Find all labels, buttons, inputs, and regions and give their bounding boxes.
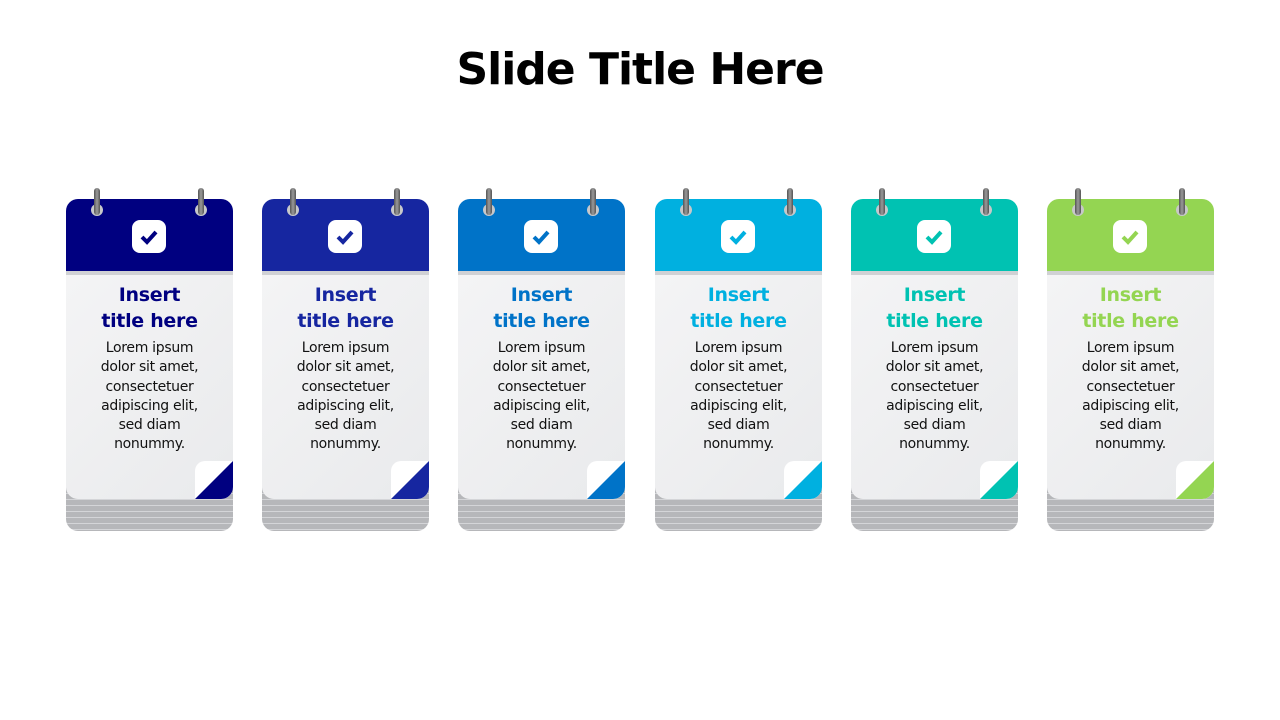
card 2: adipiscing elit, [297,398,394,414]
card 3: Insert [511,284,572,306]
card 1: sed diam [119,417,180,433]
card 6: Lorem ipsum [1087,340,1174,356]
card 6: dolor sit amet, [1082,359,1179,375]
card 1 [66,188,233,531]
card 3: Lorem ipsum [498,340,585,356]
card 1: nonummy. [114,436,185,452]
card 2 [262,188,429,531]
card 4: adipiscing elit, [690,398,787,414]
card 5: adipiscing elit, [886,398,983,414]
card 6: nonummy. [1095,436,1166,452]
card 1: title here [101,310,198,332]
card 4 [655,188,822,531]
card 5: consectetuer [890,379,978,395]
card 6 [1047,188,1214,531]
card 4: Lorem ipsum [695,340,782,356]
card 3: dolor sit amet, [493,359,590,375]
card 4: title here [690,310,787,332]
card 5: title here [886,310,983,332]
card 1: Insert [119,284,180,306]
title: Slide Title Here [456,44,824,95]
card 5: Insert [904,284,965,306]
card 1: Lorem ipsum [106,340,193,356]
card 5 [851,188,1018,531]
card 1: consectetuer [106,379,193,395]
card 3: sed diam [511,417,572,433]
card 5: Lorem ipsum [891,340,978,356]
card 1: dolor sit amet, [101,359,198,375]
card 6: consectetuer [1086,379,1174,395]
card 6: Insert [1100,284,1161,306]
card 4: dolor sit amet, [690,359,787,375]
card 2: nonummy. [310,436,381,452]
card 6: adipiscing elit, [1082,398,1179,414]
card 4: nonummy. [703,436,774,452]
card 6: sed diam [1100,417,1161,433]
card 3: nonummy. [506,436,577,452]
card 4: Insert [708,284,769,306]
card 3 [458,188,625,531]
card 3: adipiscing elit, [493,398,590,414]
card 2: title here [297,310,394,332]
card 4: sed diam [708,417,769,433]
card 5: dolor sit amet, [886,359,983,375]
card 2: Insert [315,284,376,306]
card 6: title here [1082,310,1179,332]
card 2: consectetuer [302,379,389,395]
card 3: consectetuer [498,379,585,395]
card 4: consectetuer [694,379,782,395]
card 2: Lorem ipsum [302,340,389,356]
card 2: sed diam [315,417,376,433]
card 5: nonummy. [899,436,970,452]
card 5: sed diam [904,417,965,433]
card 1: adipiscing elit, [101,398,198,414]
card 2: dolor sit amet, [297,359,394,375]
card 3: title here [493,310,590,332]
